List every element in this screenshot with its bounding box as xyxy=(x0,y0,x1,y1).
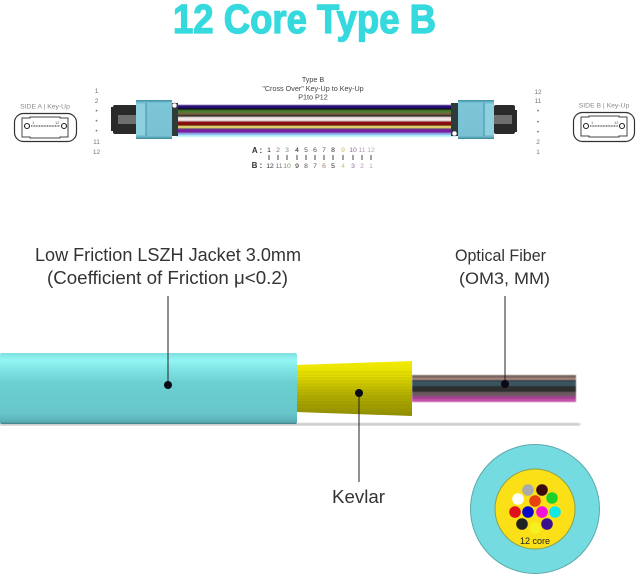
kevlar label: Kevlar xyxy=(332,487,385,507)
colored fiber ribbon xyxy=(176,105,454,137)
diagram caption: P1to P12 xyxy=(298,92,328,102)
pin mapping A to B: 12 xyxy=(367,147,375,154)
left pin numbers: 12 xyxy=(93,149,100,156)
pin mapping A to B: 6 xyxy=(313,147,317,154)
diagram caption: Type B xyxy=(302,75,324,84)
left pin numbers: • xyxy=(95,118,98,125)
optical fiber label xyxy=(455,246,550,288)
pin mapping A to B: 9 xyxy=(295,163,299,170)
right pin numbers xyxy=(534,89,542,156)
pin mapping A to B: 11 xyxy=(358,147,366,154)
optical fibers xyxy=(412,375,576,402)
left pin numbers: 1 xyxy=(95,88,99,95)
pin mapping A to B: 8 xyxy=(304,163,308,170)
pin mapping A to B: 12 xyxy=(266,163,274,170)
pin mapping A to B: 5 xyxy=(331,163,335,170)
pin mapping A to B: 7 xyxy=(322,147,326,154)
right pin numbers: 11 xyxy=(535,98,542,105)
cable shadow xyxy=(0,423,580,426)
pin mapping A to B: 3 xyxy=(285,147,289,154)
diagram caption xyxy=(262,75,364,102)
pin mapping A to B: 2 xyxy=(276,147,280,154)
jacket label: Low Friction LSZH Jacket 3.0mm xyxy=(35,245,301,265)
pin mapping A to B: 11 xyxy=(275,163,283,170)
icon: side A key-up port: 12 xyxy=(55,120,60,125)
pin mapping A to B xyxy=(252,146,375,170)
right pin numbers: • xyxy=(537,129,540,136)
right pin numbers: 1 xyxy=(536,149,540,156)
left connector xyxy=(111,100,178,139)
right pin numbers: • xyxy=(537,119,540,126)
icon: side A key-up port xyxy=(14,104,76,142)
pin mapping A to B: 10 xyxy=(283,163,291,170)
pin mapping A to B: 9 xyxy=(341,147,345,154)
left pin numbers: 11 xyxy=(93,139,100,146)
pin mapping A to B: 1 xyxy=(267,147,271,154)
optical fiber label: Optical Fiber xyxy=(455,246,546,265)
pin mapping A to B: 3 xyxy=(351,163,355,170)
left pin numbers: 2 xyxy=(95,98,99,105)
icon: side B key-up port xyxy=(574,102,634,142)
icon: side A key-up port: SIDE A | Key-Up xyxy=(20,104,70,110)
right pin numbers: 2 xyxy=(536,139,540,146)
cross-section diagram xyxy=(470,444,600,574)
optical fiber label: (OM3, MM) xyxy=(459,269,550,288)
right pin numbers: • xyxy=(537,108,540,115)
pin mapping A to B: B : xyxy=(252,161,262,170)
pin mapping A to B: 8 xyxy=(331,147,335,154)
right connector xyxy=(451,100,517,139)
kevlar layer xyxy=(296,361,412,416)
icon: side B key-up port: SIDE B | Key-Up xyxy=(579,102,629,110)
pin mapping A to B: A : xyxy=(252,146,262,155)
cable jacket xyxy=(0,353,297,424)
jacket label: (Coefficient of Friction μ<0.2) xyxy=(47,268,288,288)
pin mapping A to B: 4 xyxy=(295,147,299,154)
icon: side B key-up port: 1 xyxy=(591,120,594,125)
cross-section diagram: 12 core xyxy=(520,536,550,546)
icon: side B key-up port: 12 xyxy=(614,120,619,125)
left pin numbers: • xyxy=(95,108,98,115)
pin mapping A to B: 10 xyxy=(349,147,357,154)
right pin numbers: 12 xyxy=(534,89,542,96)
diagram caption: "Cross Over" Key-Up to Key-Up xyxy=(262,84,364,93)
pin mapping A to B: 6 xyxy=(322,163,326,170)
pin mapping A to B: 2 xyxy=(360,163,364,170)
jacket label xyxy=(35,245,301,288)
pin mapping A to B: 1 xyxy=(369,163,373,170)
pin mapping A to B: 5 xyxy=(304,147,308,154)
pin mapping A to B: 7 xyxy=(313,163,317,170)
pin mapping A to B: 4 xyxy=(341,163,345,170)
left pin numbers: • xyxy=(95,128,98,135)
pointer: kevlar xyxy=(355,389,363,482)
pointer: jacket xyxy=(164,296,172,389)
pointer: optical fiber xyxy=(501,296,509,388)
left pin numbers xyxy=(93,88,100,156)
icon: side A key-up port: 1 xyxy=(32,120,35,125)
